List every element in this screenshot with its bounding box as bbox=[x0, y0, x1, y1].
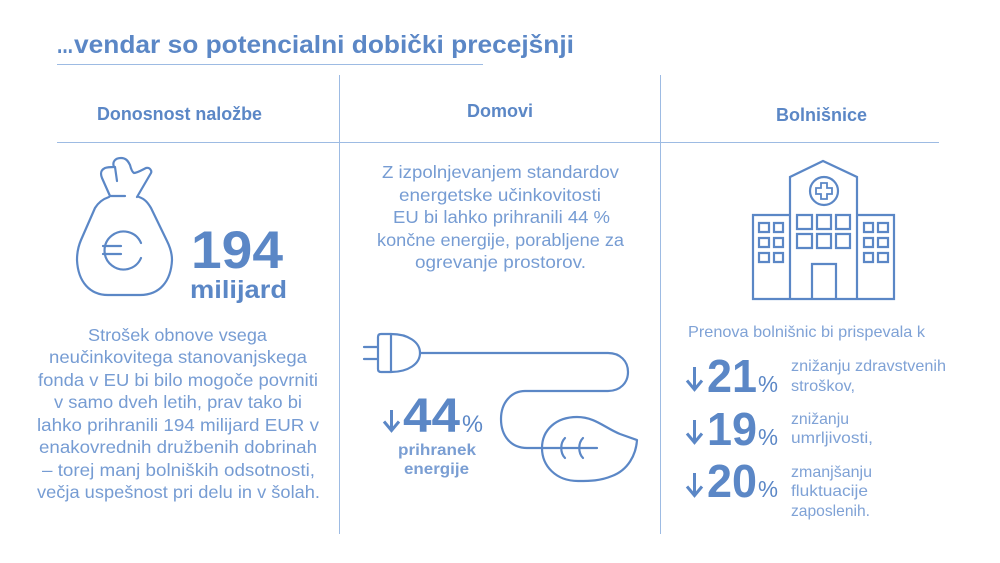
text block: strošek obnove: v samo dveh letih, prav tako bi bbox=[54, 392, 302, 412]
text block: standardi: energetske učinkovitosti bbox=[399, 185, 601, 205]
big number: 194 milijard: milijard bbox=[190, 276, 287, 304]
stat: 20%: zmanjšanju bbox=[791, 464, 872, 481]
big number: 194 milijard bbox=[190, 221, 287, 304]
stat: 20% bbox=[687, 455, 872, 520]
heading: bolnišnice: Bolnišnice bbox=[776, 105, 867, 125]
stat: 20%: % bbox=[758, 476, 778, 502]
text block: standardi bbox=[377, 162, 624, 272]
stat: 21%: % bbox=[758, 371, 778, 397]
stat: 44% prihranek energije bbox=[384, 390, 483, 478]
stat: 20%: zaposlenih. bbox=[791, 503, 870, 520]
text block: standardi: EU bi lahko prihranili 44 % bbox=[393, 207, 610, 227]
big number: 194 milijard: 194 bbox=[191, 221, 284, 280]
stat: 19%: % bbox=[758, 424, 778, 450]
text block: standardi: ogrevanje prostorov. bbox=[415, 252, 586, 272]
text block: strošek obnove: lahko prihranili 194 milijard EUR v bbox=[37, 415, 319, 435]
text block: strošek obnove: – torej manj bolniških odsotnosti, bbox=[42, 460, 315, 480]
panel: bolnišnice bbox=[687, 105, 946, 520]
text block: strošek obnove: enakovrednih družbenih dobrinah bbox=[39, 437, 317, 457]
stat: 21% bbox=[687, 350, 946, 402]
stat: 20%: 20 bbox=[707, 455, 757, 507]
stat: 19%: 19 bbox=[707, 403, 757, 455]
stat: 44% prihranek energije: % bbox=[462, 411, 483, 438]
stat: 21%: znižanju zdravstvenih bbox=[791, 358, 946, 375]
text block: strošek obnove: fonda v EU bi bilo mogoče povrniti bbox=[38, 370, 318, 390]
panel: donosnost naložbe bbox=[37, 104, 320, 502]
stat: 19% bbox=[687, 403, 873, 455]
stat: 19%: umrljivosti, bbox=[791, 430, 873, 447]
heading: domovi: Domovi bbox=[467, 101, 533, 121]
stat: 20%: fluktuacije bbox=[791, 483, 868, 500]
stat: 21%: 21 bbox=[707, 350, 757, 402]
icon: plug with leaf bbox=[364, 334, 637, 481]
panel: domovi bbox=[364, 101, 637, 481]
stat: 21%: stroškov, bbox=[791, 378, 855, 395]
title: ... bbox=[57, 31, 73, 59]
icon: hospital bbox=[753, 161, 894, 299]
text block: standardi: Z izpolnjevanjem standardov bbox=[382, 162, 619, 182]
stat: 44% prihranek energije: prihranek bbox=[398, 442, 476, 459]
text: prenova bolnišnic: Prenova bolnišnic bi prispevala k bbox=[688, 324, 926, 341]
stat: 44% prihranek energije: energije bbox=[404, 461, 469, 478]
stat: 44% prihranek energije: 44 bbox=[403, 390, 460, 443]
text block: strošek obnove bbox=[37, 325, 320, 502]
stat: 19%: znižanju bbox=[791, 411, 849, 428]
text block: strošek obnove: neučinkovitega stanovanjskega bbox=[49, 347, 307, 367]
text block: standardi: končne energije, porabljene za bbox=[377, 230, 624, 250]
text block: strošek obnove: večja uspešnost pri delu in v šolah. bbox=[37, 482, 320, 502]
text block: strošek obnove: Strošek obnove vsega bbox=[88, 325, 267, 345]
icon: money bag bbox=[77, 158, 172, 295]
title: vendar so potencialni dobički precejšnji bbox=[74, 31, 574, 59]
heading: donosnost naložbe: Donosnost naložbe bbox=[97, 104, 262, 124]
